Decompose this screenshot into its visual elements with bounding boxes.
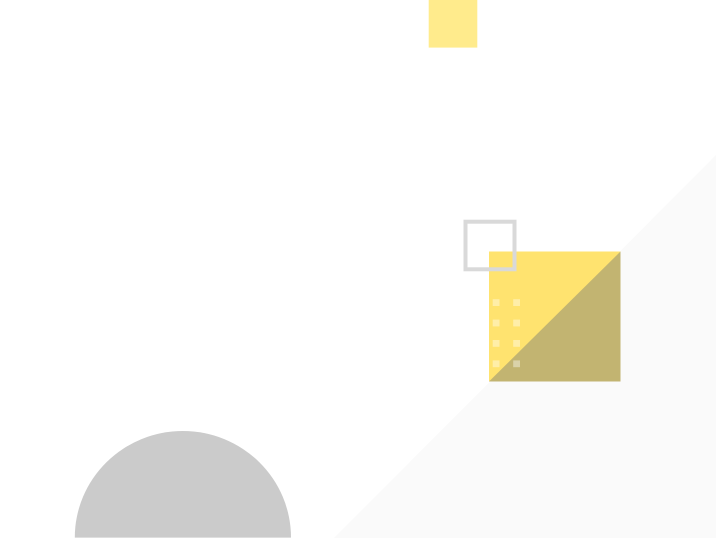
dark olive triangle bbox=[489, 252, 620, 382]
yellow square with dark diagonal bbox=[489, 252, 620, 382]
pale yellow square at top bbox=[429, 0, 477, 48]
grid of light dots bbox=[493, 299, 520, 367]
grey outlined square bbox=[466, 222, 514, 269]
grey semicircle bbox=[75, 431, 291, 538]
light grey background triangle bbox=[334, 155, 716, 538]
yellow square bbox=[489, 252, 620, 382]
